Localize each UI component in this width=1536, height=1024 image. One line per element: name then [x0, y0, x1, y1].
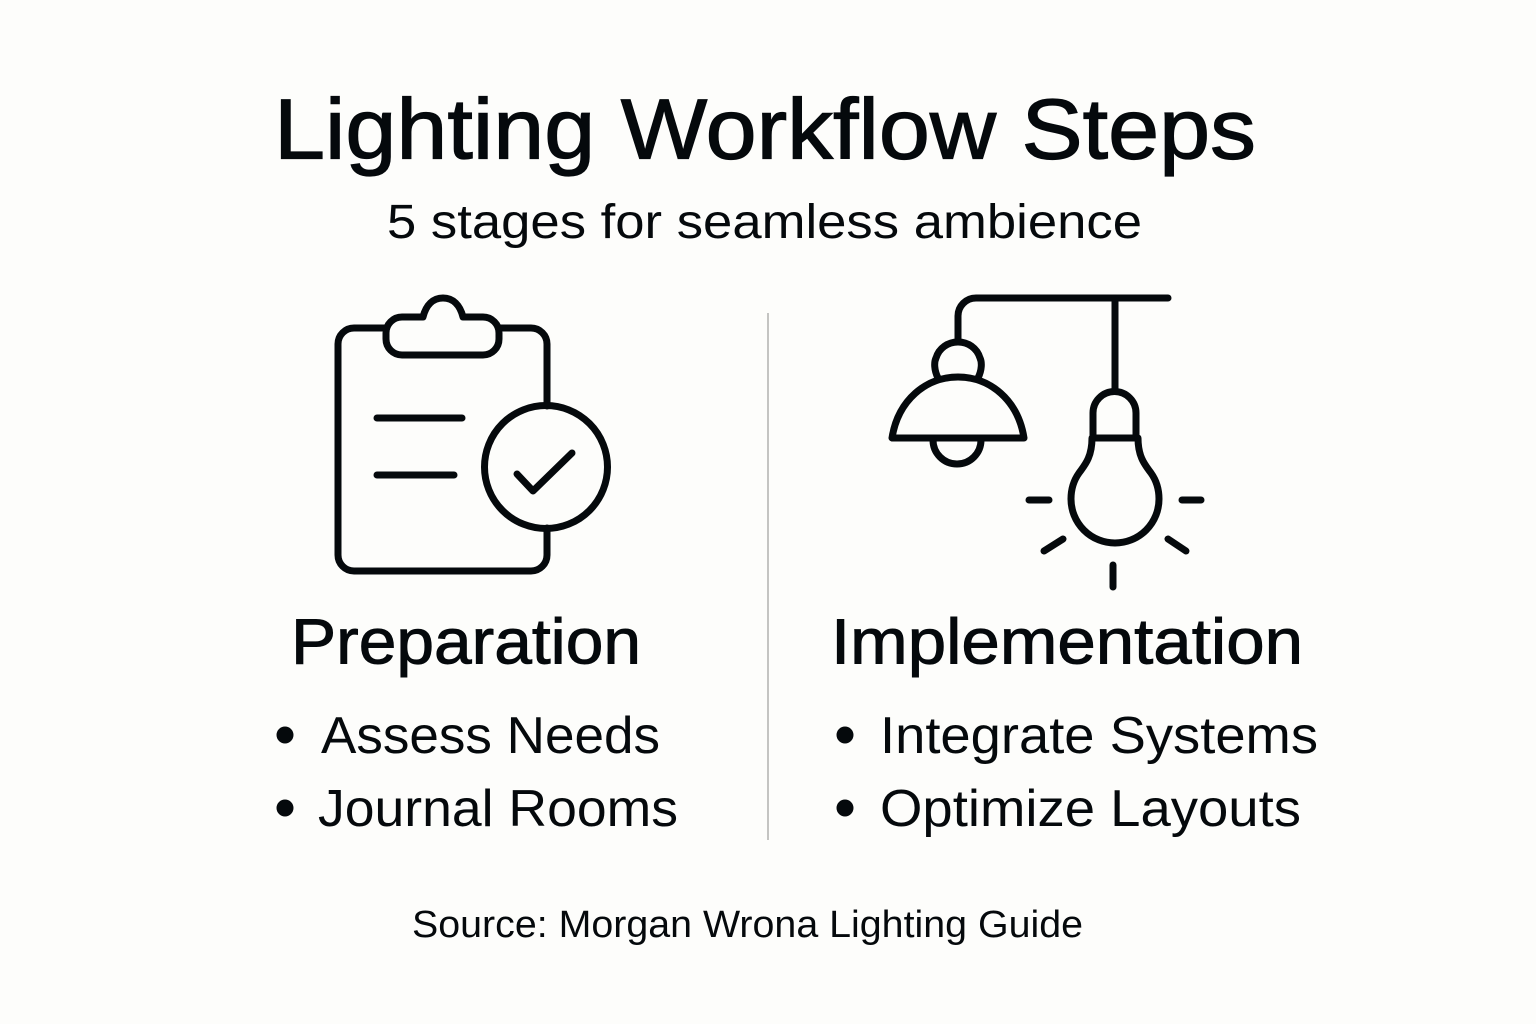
center divider: [767, 313, 769, 840]
bullet: Optimize Layouts: Optimize Layouts: [880, 780, 1301, 838]
source note: Source: Morgan Wrona Lighting Guide: [412, 904, 1083, 946]
bullet: Integrate Systems: Integrate Systems: [880, 707, 1318, 765]
heading: Preparation: Preparation: [291, 606, 641, 678]
subtitle: 5 stages for seamless ambience: [387, 196, 1142, 249]
bullet: Journal Rooms: Journal Rooms: [318, 780, 678, 838]
bullet: Assess Needs: Assess Needs: [321, 707, 660, 765]
heading: Implementation: Implementation: [831, 606, 1303, 678]
title: Lighting Workflow Steps: [274, 82, 1256, 178]
icon: pendant lamp and light bulb: [892, 298, 1201, 587]
icon: clipboard with check mark: [338, 298, 608, 571]
